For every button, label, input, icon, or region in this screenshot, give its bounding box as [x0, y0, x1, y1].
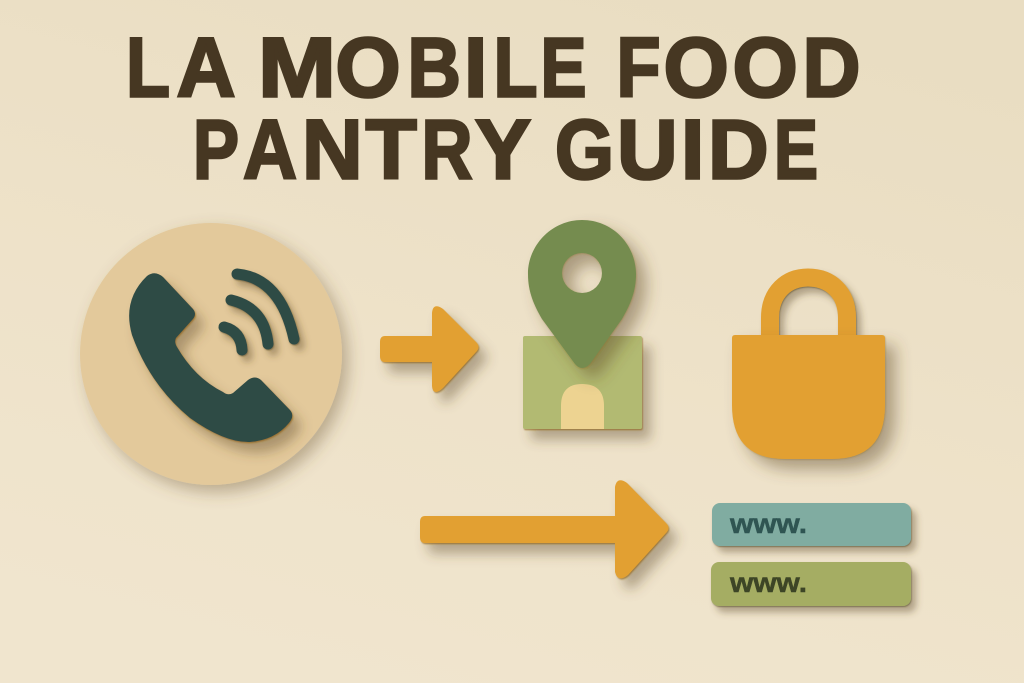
url bar: teal: www. — [729, 508, 807, 539]
title: I — [464, 20, 487, 114]
door — [561, 384, 604, 429]
arrow: small orange — [380, 306, 478, 392]
title: O — [732, 20, 798, 114]
title: I — [681, 102, 704, 196]
title: D — [708, 102, 769, 196]
arrow: long orange — [420, 480, 668, 578]
icon: location pin on building — [523, 220, 642, 429]
title: O — [664, 20, 729, 114]
title: G — [555, 102, 614, 196]
url bar: green: www. — [729, 567, 807, 598]
title: A — [176, 20, 234, 114]
body — [732, 335, 885, 459]
title: P — [193, 102, 239, 196]
title: E — [540, 20, 586, 114]
icon: phone in circle — [80, 223, 342, 485]
title: Y — [475, 102, 530, 196]
title: U — [617, 102, 678, 196]
title: L — [126, 20, 170, 114]
title — [126, 20, 860, 196]
title: R — [422, 102, 472, 196]
title: N — [302, 102, 363, 196]
title: D — [802, 20, 860, 114]
url bar: green — [711, 562, 911, 606]
icon: padlock bag — [732, 278, 885, 459]
shackle — [770, 278, 847, 345]
title: E — [774, 102, 818, 196]
map pin — [528, 220, 636, 368]
title: F — [616, 20, 660, 114]
title: L — [494, 20, 538, 114]
title: B — [408, 20, 461, 114]
url bar: teal — [712, 503, 911, 546]
title: A — [243, 102, 297, 196]
title: T — [366, 102, 417, 196]
building — [523, 336, 642, 429]
signal waves — [224, 274, 294, 350]
phone handset — [129, 273, 292, 442]
title: M — [258, 20, 336, 114]
title: O — [335, 20, 401, 114]
